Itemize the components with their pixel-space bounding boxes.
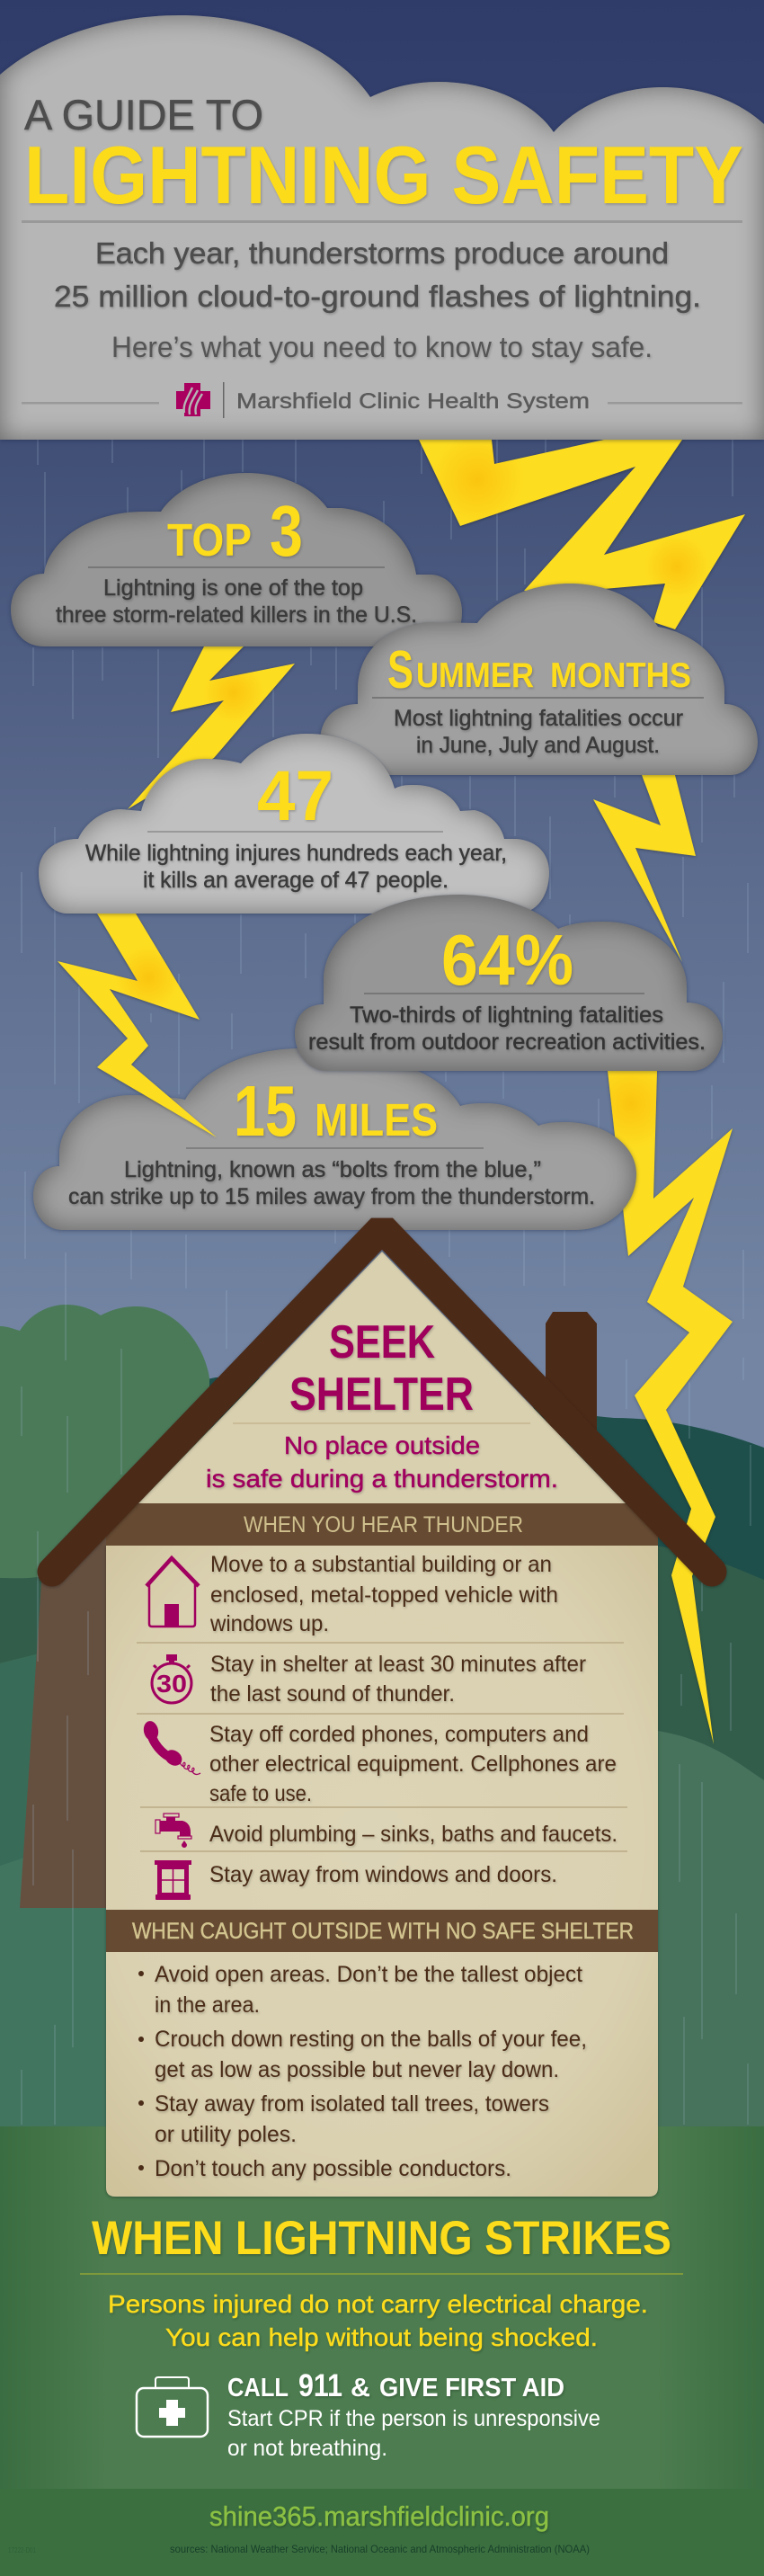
- call 911: CALL: [227, 2374, 289, 2402]
- outdoor safety bullet list: Crouch down resting on the balls of your fee,: [155, 2027, 587, 2052]
- title cloud: [0, 15, 764, 440]
- item: move to a building: Move to a substantial building or an: [210, 1552, 552, 1577]
- cloud text: 15 miles: [68, 1071, 595, 1209]
- call 911: [227, 2368, 564, 2403]
- intro text: 25 million cloud-to-ground flashes of lightning.: [54, 280, 701, 313]
- cloud text: top 3: 3: [270, 491, 303, 571]
- first aid text: [227, 2406, 600, 2461]
- item: stay off corded phones: Stay off corded phones, computers and: [209, 1722, 589, 1747]
- strikes subtext: [108, 2290, 648, 2351]
- item: avoid plumbing: [155, 1814, 617, 1848]
- cloud text: summer months: Most lightning fatalities occur: [394, 706, 683, 731]
- house chimney: [546, 1312, 597, 1439]
- seek shelter subtext: No place outside: [284, 1431, 480, 1459]
- rain streaks: [22, 440, 751, 2125]
- title rule: [22, 220, 742, 223]
- band: when caught outside: WHEN CAUGHT OUTSIDE WITH NO SAFE SHELTER: [132, 1919, 634, 1944]
- cloud: 47: [39, 734, 549, 914]
- cloud text: 47: [85, 755, 507, 893]
- cloud text: 64 percent: result from outdoor recreation activities.: [308, 1030, 706, 1055]
- sources: sources: National Weather Service; National Oceanic and Atmospheric Administration (NOAA): [170, 2543, 590, 2555]
- band: when caught outside: [106, 1910, 658, 1952]
- icon: stopwatch 30: [152, 1654, 191, 1703]
- cloud text: 15 miles: 15: [234, 1071, 297, 1151]
- outdoor safety bullet list: get as low as possible but never lay down.: [155, 2057, 559, 2082]
- item: stay off corded phones: safe to use.: [209, 1781, 312, 1806]
- landscape: tree and hills: [0, 1305, 764, 2126]
- lightning bolt: left middle: [58, 646, 295, 1137]
- outdoor safety bullet list: Don’t touch any possible conductors.: [155, 2156, 511, 2181]
- item: avoid plumbing: Avoid plumbing – sinks, baths and faucets.: [209, 1822, 617, 1847]
- item: move to a building: [147, 1552, 558, 1636]
- item: move to a building: enclosed, metal-topped vehicle with: [210, 1582, 558, 1608]
- strikes subtext: Persons injured do not carry electrical charge.: [108, 2290, 648, 2318]
- ground: [0, 2126, 764, 2489]
- intro text: Each year, thunderstorms produce around: [95, 236, 669, 270]
- cloud text: 64 percent: Two-thirds of lightning fatalities: [350, 1003, 663, 1028]
- house side wall: [20, 1520, 106, 1908]
- icon: window: [155, 1860, 191, 1900]
- item: stay in shelter: [152, 1652, 586, 1707]
- cloud text: 64 percent: 64%: [441, 920, 573, 1000]
- first aid text: Start CPR if the person is unresponsive: [227, 2406, 600, 2431]
- lightning bolt: top right: [419, 432, 745, 962]
- outdoor safety bullet list: [138, 1962, 587, 2181]
- icon: telephone: [142, 1720, 200, 1774]
- first aid text: or not breathing.: [227, 2436, 387, 2461]
- call 911: &: [351, 2374, 370, 2402]
- item: stay away from windows: [155, 1860, 557, 1900]
- cloud: top 3: [11, 473, 462, 646]
- heading: seek shelter: SHELTER: [289, 1368, 474, 1421]
- list dividers: [137, 1642, 627, 1852]
- logo: Marshfield Clinic Health System: [22, 382, 742, 418]
- cloud text: top 3: TOP: [167, 514, 252, 566]
- outdoor safety bullet list: or utility poles.: [155, 2122, 297, 2147]
- strikes subtext: You can help without being shocked.: [165, 2323, 598, 2351]
- seek shelter subtext: is safe during a thunderstorm.: [206, 1465, 558, 1493]
- strikes rule: [80, 2273, 683, 2275]
- outdoor safety bullet list: in the area.: [155, 1992, 260, 2018]
- cloud text: summer months: [372, 640, 704, 758]
- cloud text: 47: While lightning injures hundreds each year,: [85, 841, 507, 866]
- heading: when lightning strikes: WHEN LIGHTNING STRIKES: [92, 2212, 671, 2265]
- call 911: GIVE FIRST AID: [379, 2374, 564, 2402]
- cloud: 64 percent: [295, 895, 723, 1071]
- cloud text: summer months: S: [387, 640, 413, 700]
- icon: faucet: [155, 1814, 191, 1848]
- item: move to a building: windows up.: [209, 1611, 329, 1636]
- item: stay away from windows: Stay away from windows and doors.: [209, 1862, 557, 1887]
- house roof: [52, 1228, 712, 1572]
- call 911: 911: [298, 2368, 342, 2403]
- cloud text: 47: it kills an average of 47 people.: [143, 868, 449, 893]
- lightning bolt: right lower: [607, 1071, 733, 1744]
- seek shelter rule: [233, 1422, 530, 1424]
- cloud text: summer months: MONTHS: [550, 656, 691, 695]
- heading: seek shelter: SEEK: [329, 1316, 435, 1368]
- intro text: [54, 236, 701, 313]
- cloud: 15 miles: [33, 1048, 636, 1230]
- outdoor safety bullet list: Stay away from isolated tall trees, towers: [155, 2091, 549, 2117]
- cloud text: summer months: UMMER: [416, 656, 534, 695]
- icon: first aid kit: [137, 2377, 208, 2437]
- cloud text: top 3: three storm-related killers in the U.S.: [56, 602, 417, 628]
- cloud text: top 3: [56, 491, 417, 628]
- footer band: [0, 2489, 764, 2576]
- cloud text: 47: 47: [257, 755, 333, 835]
- footer url: shine365.marshfieldclinic.org: [209, 2500, 549, 2532]
- title: A Guide To: A GUIDE TO: [24, 91, 263, 138]
- icon: stopwatch 30: 30: [156, 1670, 187, 1698]
- item: stay in shelter: the last sound of thunder.: [210, 1681, 455, 1707]
- item: stay off corded phones: other electrical equipment. Cellphones are: [209, 1752, 617, 1777]
- logo: Marshfield Clinic Health System: Marshfield Clinic Health System: [236, 389, 590, 414]
- house panel: [106, 1252, 658, 2197]
- cloud text: 15 miles: can strike up to 15 miles away from the thunderstorm.: [68, 1184, 595, 1209]
- cloud text: top 3: Lightning is one of the top: [103, 575, 363, 601]
- seek shelter subtext: [206, 1431, 558, 1493]
- heading: seek shelter: [289, 1316, 474, 1421]
- outdoor safety bullet list: Avoid open areas. Don’t be the tallest object: [155, 1962, 582, 1987]
- cloud text: summer months: in June, July and August.: [416, 733, 660, 758]
- cloud text: 15 miles: MILES: [315, 1094, 438, 1145]
- job code: 17222-D01: [8, 2546, 36, 2554]
- intro subtext: Here’s what you need to know to stay safe.: [111, 331, 653, 363]
- cloud text: 64 percent: [308, 920, 706, 1055]
- band: when you hear thunder: [106, 1503, 658, 1546]
- item: stay off corded phones: [142, 1720, 617, 1806]
- cloud: summer months: [320, 584, 758, 775]
- band: when you hear thunder: WHEN YOU HEAR THUNDER: [244, 1512, 523, 1538]
- icon: house: [147, 1558, 199, 1627]
- cloud text: 15 miles: Lightning, known as “bolts from the blue,”: [124, 1157, 541, 1182]
- item: stay in shelter: Stay in shelter at least 30 minutes after: [210, 1652, 586, 1677]
